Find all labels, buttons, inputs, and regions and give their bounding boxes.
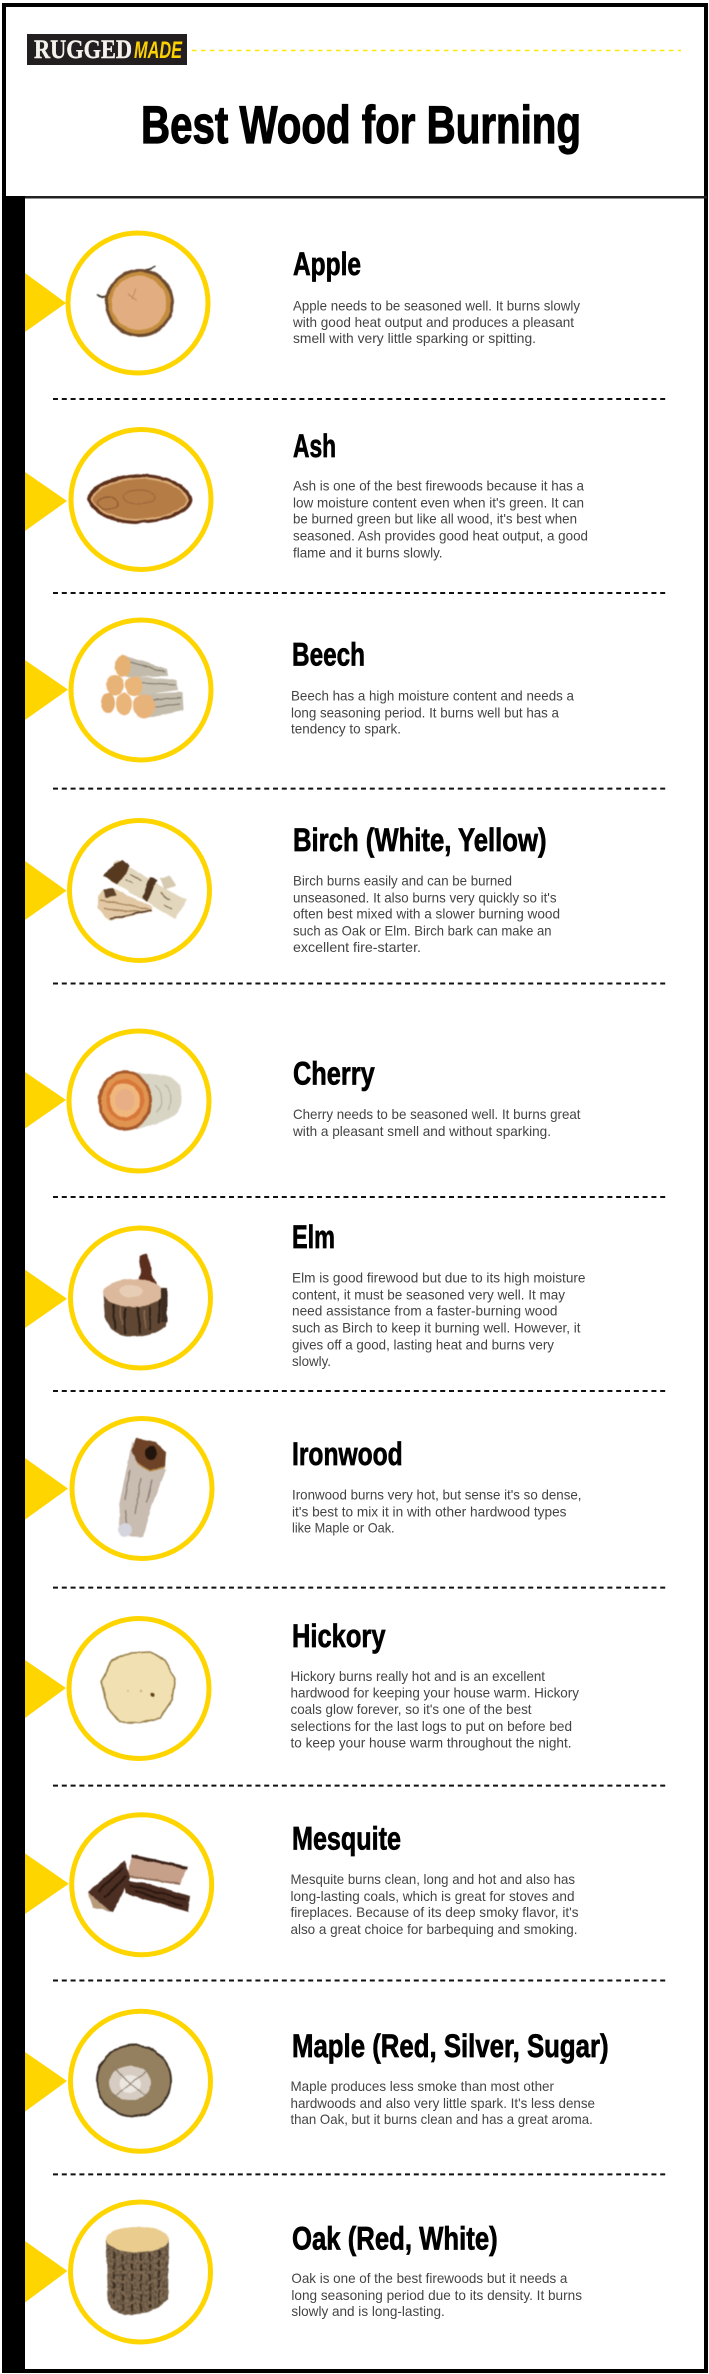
heading: Beech: Beech bbox=[292, 637, 365, 673]
text: Elm: content, it must be seasoned very well. It may bbox=[292, 1287, 565, 1303]
text: Oak bbox=[291, 2270, 582, 2319]
arrow: Mesquite bbox=[25, 1853, 69, 1914]
text: Birch: Birch burns easily and can be burned bbox=[293, 872, 512, 888]
arrow: Beech bbox=[25, 660, 68, 720]
row: Hickory bbox=[25, 1618, 579, 1758]
circle: Cherry bbox=[69, 1031, 209, 1171]
circle: Apple bbox=[68, 233, 208, 373]
text: Cherry: with a pleasant smell and without sparking. bbox=[292, 1123, 551, 1139]
text: Cherry: Cherry needs to be seasoned well. It burns great bbox=[293, 1106, 581, 1122]
logo bbox=[27, 34, 187, 65]
oak bark bbox=[106, 2240, 169, 2314]
icon: birch logs bbox=[98, 860, 187, 921]
text: Birch: such as Oak or Elm. Birch bark can make an bbox=[293, 922, 552, 938]
circle: Hickory bbox=[69, 1618, 209, 1758]
text: Mesquite: also a great choice for barbequing and smoking. bbox=[290, 1921, 578, 1937]
text: Elm: need assistance from a faster-burning wood bbox=[292, 1303, 558, 1319]
circle: Birch bbox=[70, 820, 210, 960]
row: Oak bbox=[25, 2202, 582, 2342]
arrow: Hickory bbox=[25, 1660, 66, 1718]
arrow: Apple bbox=[25, 273, 66, 332]
arrow: Ash bbox=[25, 472, 67, 531]
text: Elm: slowly. bbox=[292, 1353, 331, 1369]
text: Beech: tendency to spark. bbox=[291, 721, 401, 737]
heading: Ironwood: Ironwood bbox=[292, 1436, 403, 1472]
text: Ash: low moisture content even when it's green. It can bbox=[293, 494, 584, 510]
dotted yellow header line bbox=[192, 50, 681, 52]
text: Hickory: to keep your house warm throughout the night. bbox=[290, 1735, 572, 1751]
text: Beech bbox=[291, 687, 574, 737]
logo: RUGGED bbox=[34, 35, 132, 64]
text: Elm: such as Birch to keep it burning well. However, it bbox=[292, 1320, 581, 1336]
text: Elm bbox=[292, 1269, 586, 1369]
circle: Mesquite bbox=[72, 1815, 212, 1955]
heading: Ash: Ash bbox=[293, 428, 336, 464]
arrow: Birch bbox=[25, 861, 66, 920]
row: Mesquite bbox=[25, 1815, 578, 1955]
circle: Elm bbox=[70, 1228, 210, 1368]
text: Mesquite: fireplaces. Because of its deep smoky flavor, it's bbox=[290, 1904, 578, 1920]
icon: maple slice bbox=[96, 2044, 172, 2117]
arrow: Ironwood bbox=[25, 1458, 68, 1520]
row: Cherry bbox=[25, 1031, 581, 1171]
text: Ash: be burned green but like all wood, it's best when bbox=[293, 511, 577, 527]
text: Ash bbox=[293, 478, 588, 560]
text: Mesquite: long-lasting coals, which is great for stoves and bbox=[290, 1888, 574, 1904]
text: Hickory: selections for the last logs to put on before bed bbox=[290, 1718, 572, 1734]
text: Birch: often best mixed with a slower burning wood bbox=[293, 906, 560, 922]
circle: Beech bbox=[71, 620, 211, 760]
oak top bbox=[106, 2226, 169, 2252]
text: Hickory: coals glow forever, so it's one of the best bbox=[290, 1701, 532, 1717]
heading: Apple: Apple bbox=[293, 246, 361, 282]
text: Ironwood: like Maple or Oak. bbox=[292, 1520, 395, 1536]
arrow: Maple bbox=[25, 2052, 67, 2112]
row: Elm bbox=[25, 1219, 586, 1369]
heading: Elm: Elm bbox=[292, 1219, 335, 1255]
text: Ironwood: it's best to mix it in with other hardwood types bbox=[292, 1504, 566, 1520]
icon: cherry log bbox=[98, 1071, 182, 1131]
icon: elm stump bbox=[103, 1254, 167, 1337]
heading: Mesquite: Mesquite bbox=[292, 1820, 401, 1856]
text: Mesquite: Mesquite burns clean, long and hot and also has bbox=[290, 1871, 575, 1887]
text: Oak: long seasoning period due to its density. It burns bbox=[291, 2287, 582, 2303]
text: Maple: Maple produces less smoke than most other bbox=[290, 2078, 554, 2094]
icon: hickory slice bbox=[101, 1652, 175, 1723]
icon: oak stump bbox=[106, 2226, 169, 2314]
text: Apple: with good heat output and produces a pleasant bbox=[292, 314, 574, 330]
text: Maple: hardwoods and also very little spark. It's less dense bbox=[290, 2095, 595, 2111]
text: Ash: flame and it burns slowly. bbox=[293, 544, 442, 560]
icon: mesquite pieces bbox=[88, 1856, 190, 1912]
circle: Ash bbox=[71, 430, 211, 570]
text: Beech: long seasoning period. It burns well but has a bbox=[291, 704, 559, 720]
arrow: Cherry bbox=[25, 1072, 66, 1128]
icon: ironwood log bbox=[118, 1438, 166, 1537]
black side bar bbox=[2, 196, 25, 2373]
arrow: Elm bbox=[25, 1270, 67, 1328]
text: Hickory: Hickory burns really hot and is an excellent bbox=[290, 1668, 545, 1684]
text: Maple bbox=[290, 2078, 595, 2127]
text: Hickory bbox=[290, 1668, 579, 1751]
row: Birch bbox=[25, 820, 560, 960]
text: Apple: smell with very little sparking or spitting. bbox=[293, 330, 536, 346]
circle: Maple bbox=[70, 2011, 210, 2151]
text: Hickory: hardwood for keeping your house warm. Hickory bbox=[290, 1684, 579, 1700]
text: Birch: excellent fire-starter. bbox=[293, 939, 421, 955]
row: Ironwood bbox=[25, 1418, 582, 1558]
text: Elm: Elm is good firewood but due to its high moisture bbox=[292, 1269, 586, 1285]
heading: Maple: Maple (Red, Silver, Sugar) bbox=[292, 2028, 609, 2064]
row: Apple bbox=[25, 233, 580, 373]
text: Ironwood: Ironwood burns very hot, but sense it's so dense, bbox=[292, 1486, 582, 1502]
row: Maple bbox=[25, 2011, 609, 2151]
text: Oak: slowly and is long-lasting. bbox=[291, 2303, 445, 2319]
heading: Birch: Birch (White, Yellow) bbox=[293, 822, 546, 858]
icon: beech log pile bbox=[101, 655, 183, 718]
text: Ironwood bbox=[292, 1486, 582, 1536]
heading: Hickory: Hickory bbox=[292, 1618, 386, 1654]
heading: Oak: Oak (Red, White) bbox=[292, 2220, 498, 2256]
text: Oak: Oak is one of the best firewoods but it needs a bbox=[291, 2270, 568, 2286]
text: Apple: Apple needs to be seasoned well. It burns slowly bbox=[293, 298, 580, 314]
text: Birch: unseasoned. It also burns very quickly so it's bbox=[293, 890, 556, 906]
heading: Cherry: Cherry bbox=[293, 1056, 375, 1092]
text: Maple: than Oak, but it burns clean and has a great aroma. bbox=[290, 2111, 593, 2127]
text: Mesquite bbox=[290, 1871, 578, 1937]
icon: apple wood slice bbox=[97, 266, 174, 337]
text: Birch bbox=[293, 872, 560, 955]
circle: Oak bbox=[70, 2202, 210, 2342]
circle: Ironwood bbox=[72, 1418, 212, 1558]
logo: MADE bbox=[134, 37, 183, 64]
row: Beech bbox=[25, 620, 574, 760]
arrow: Oak bbox=[25, 2241, 67, 2302]
title: Best Wood for Burning bbox=[141, 96, 581, 155]
text: Ash: Ash is one of the best firewoods because it has a bbox=[293, 478, 584, 494]
text: Apple bbox=[292, 298, 580, 346]
row: Ash bbox=[25, 428, 588, 570]
text: Elm: gives off a good, lasting heat and burns very bbox=[292, 1336, 554, 1352]
text: Cherry bbox=[292, 1106, 581, 1139]
icon: ash wood slice bbox=[87, 474, 192, 524]
text: Ash: seasoned. Ash provides good heat output, a good bbox=[293, 528, 588, 544]
text: Beech: Beech has a high moisture content and needs a bbox=[291, 687, 574, 703]
